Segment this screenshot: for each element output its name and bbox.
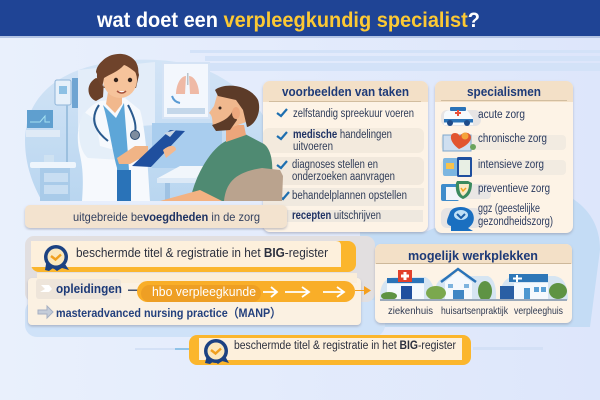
wall monitor bbox=[26, 110, 60, 137]
icon: huisartsenpraktijk bbox=[426, 269, 496, 301]
heading: mogelijk werkplekken bbox=[408, 248, 538, 263]
background streaks bbox=[25, 50, 600, 350]
stethoscope bbox=[94, 105, 135, 141]
specialism labels: gezondheidszorg) bbox=[478, 216, 553, 228]
bar: uitgebreide bevoegdheden bbox=[25, 205, 287, 228]
specialism labels: acute zorg bbox=[478, 109, 525, 121]
task: recepten: recepten uitschrijven bbox=[292, 210, 381, 222]
head bbox=[209, 92, 248, 130]
title banner bbox=[0, 0, 600, 38]
panel: voorbeelden van taken bbox=[263, 81, 428, 232]
banner: beschermde titel bbox=[31, 241, 356, 272]
pill: hbo verpleegkunde: hbo verpleegkunde bbox=[152, 285, 256, 299]
neck and face bbox=[106, 92, 122, 113]
shirt bbox=[190, 134, 272, 201]
task list bbox=[277, 108, 414, 202]
specialism labels: preventieve zorg bbox=[478, 183, 550, 195]
task list: onderzoeken aanvragen bbox=[292, 171, 395, 183]
lung poster bbox=[163, 63, 209, 118]
panel: mogelijk werkplekken bbox=[375, 244, 572, 323]
arrow to werkplekken bbox=[355, 286, 371, 295]
icon: heart chart bbox=[443, 132, 476, 151]
panel: opleidingen and registratie bbox=[25, 236, 375, 325]
workplace labels bbox=[388, 305, 563, 317]
bar: uitgebreide bevoegdheden: uitgebreide bevoegdheden in de zorg bbox=[73, 210, 260, 224]
banner: bottom beschermde titel: beschermde titel & registratie in het BIG-register bbox=[234, 340, 456, 352]
nurse bbox=[78, 54, 185, 201]
white coat bbox=[78, 98, 150, 201]
chair bbox=[224, 168, 283, 201]
panel: specialismen bbox=[435, 81, 573, 233]
exam table bbox=[157, 166, 205, 201]
workplace labels: verpleeghuis bbox=[514, 305, 563, 317]
heading: voorbeelden van taken bbox=[282, 85, 409, 99]
icon: rosette bbox=[44, 245, 69, 271]
workplace labels: huisartsenpraktijk bbox=[441, 305, 509, 317]
scrubs bbox=[103, 103, 131, 201]
task list: behandelplannen opstellen bbox=[292, 190, 407, 202]
workplace labels: ziekenhuis bbox=[388, 305, 433, 317]
counter and drawers bbox=[30, 155, 76, 201]
opleidingen row bbox=[40, 281, 371, 302]
clinic room background bbox=[25, 60, 272, 201]
task list: diagnoses stellen en bbox=[292, 159, 378, 171]
icon: shield with document bbox=[441, 181, 472, 201]
task list: uitvoeren bbox=[293, 141, 333, 153]
specialism labels: intensieve zorg bbox=[478, 159, 544, 171]
hair back bbox=[88, 55, 139, 101]
patient bbox=[160, 86, 283, 201]
task list: medische handelingen bbox=[293, 129, 392, 141]
task list: zelfstandig spreekuur voeren bbox=[293, 108, 414, 120]
opleidingen row: opleidingen bbox=[56, 282, 122, 296]
title: wat doet een verpleegkundig specialist? bbox=[96, 9, 480, 32]
icon: ziekenhuis bbox=[380, 270, 436, 300]
pill: hbo verpleegkunde bbox=[137, 281, 355, 302]
icon: clipboard and folder bbox=[443, 157, 472, 177]
iv stand bbox=[55, 78, 78, 165]
icon: ambulance bbox=[444, 107, 473, 126]
specialism labels bbox=[478, 109, 553, 228]
icon: verpleeghuis bbox=[500, 274, 568, 300]
arm and clipboard bbox=[117, 146, 148, 164]
heading: specialismen bbox=[467, 85, 541, 99]
icon: rosette bbox=[204, 339, 229, 364]
specialism labels: ggz (geestelijke bbox=[478, 203, 540, 215]
specialism labels: chronische zorg bbox=[478, 133, 547, 145]
master row: masteradvanced nursing practice（MANP） bbox=[56, 305, 281, 320]
icon: head with heart bbox=[447, 207, 474, 231]
banner: bottom beschermde titel bbox=[189, 335, 471, 365]
banner: beschermde titel: beschermde titel & registratie in het BIG-register bbox=[76, 246, 328, 260]
